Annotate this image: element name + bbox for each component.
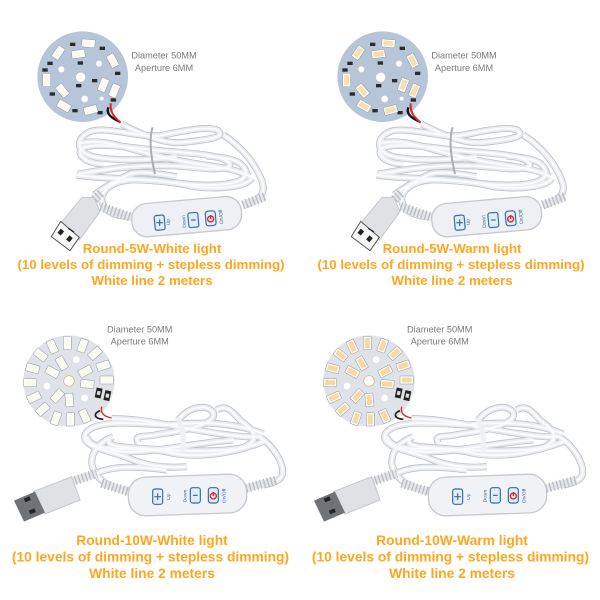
photo: 5W LED disc white — [37, 31, 128, 123]
panel: Round-10W warm light — [312, 324, 589, 581]
caption: White line 2 meters — [389, 566, 515, 581]
specification text: Diameter 50MM — [431, 50, 497, 60]
photo: cable with USB plug and dimmer switch: Down — [181, 215, 188, 228]
caption: White line 2 meters — [391, 273, 513, 288]
specification text — [131, 50, 197, 73]
caption: Round-5W-Warm light — [383, 241, 522, 256]
photo: cable with USB plug and dimmer switch — [14, 407, 283, 522]
photo: cable with USB plug and dimmer switch: Down — [481, 215, 488, 228]
caption: Round-10W-Warm light — [376, 533, 528, 548]
photo: 10W LED disc warm — [323, 335, 415, 427]
caption — [312, 533, 589, 581]
photo: cable with USB plug and dimmer switch: On/Off — [222, 488, 228, 503]
photo: cable with USB plug and dimmer switch — [351, 124, 565, 251]
caption: White line 2 meters — [89, 566, 215, 581]
caption: (10 levels of dimming + stepless dimming) — [317, 257, 585, 272]
caption: (10 levels of dimming + stepless dimming) — [12, 550, 289, 564]
photo: 5W LED disc warm — [337, 31, 428, 123]
caption: White line 2 meters — [91, 273, 213, 288]
caption: (10 levels of dimming + stepless dimming) — [312, 550, 589, 564]
photo: cable with USB plug and dimmer switch: On/Off — [522, 488, 528, 503]
specification text: Aperture 6MM — [411, 336, 469, 346]
panel: Round-5W warm light — [317, 31, 585, 288]
photo: cable with USB plug and dimmer switch: On/Off — [518, 209, 525, 224]
photo: cable with USB plug and dimmer switch: On/Off — [218, 209, 225, 224]
specification text: Diameter 50MM — [131, 50, 197, 60]
specification text — [107, 324, 172, 346]
specification text: Diameter 50MM — [107, 324, 172, 334]
photo: cable with USB plug and dimmer switch: Up — [465, 218, 472, 226]
panel: Round-5W white light — [17, 31, 285, 288]
caption — [12, 533, 289, 581]
specification text: Diameter 50MM — [407, 324, 472, 334]
photo: cable with USB plug and dimmer switch: Up — [165, 218, 172, 226]
photo: cable with USB plug and dimmer switch — [314, 407, 583, 522]
specification text — [431, 50, 497, 73]
caption: Round-5W-White light — [83, 241, 222, 256]
panel: Round-10W white light — [12, 324, 289, 581]
caption: Round-10W-White light — [76, 533, 228, 548]
specification text: Aperture 6MM — [435, 63, 493, 73]
caption — [17, 241, 285, 288]
specification text: Aperture 6MM — [111, 336, 169, 346]
specification text: Aperture 6MM — [135, 63, 193, 73]
specification text — [407, 324, 472, 346]
photo: cable with USB plug and dimmer switch: Down — [482, 489, 488, 502]
photo: cable with USB plug and dimmer switch — [51, 124, 265, 251]
photo: cable with USB plug and dimmer switch: Down — [182, 489, 188, 502]
photo: 10W LED disc white — [23, 335, 115, 427]
photo: cable with USB plug and dimmer switch: Up — [466, 493, 472, 500]
photo: cable with USB plug and dimmer switch: Up — [166, 493, 172, 500]
caption — [317, 241, 585, 288]
caption: (10 levels of dimming + stepless dimming) — [17, 257, 285, 272]
